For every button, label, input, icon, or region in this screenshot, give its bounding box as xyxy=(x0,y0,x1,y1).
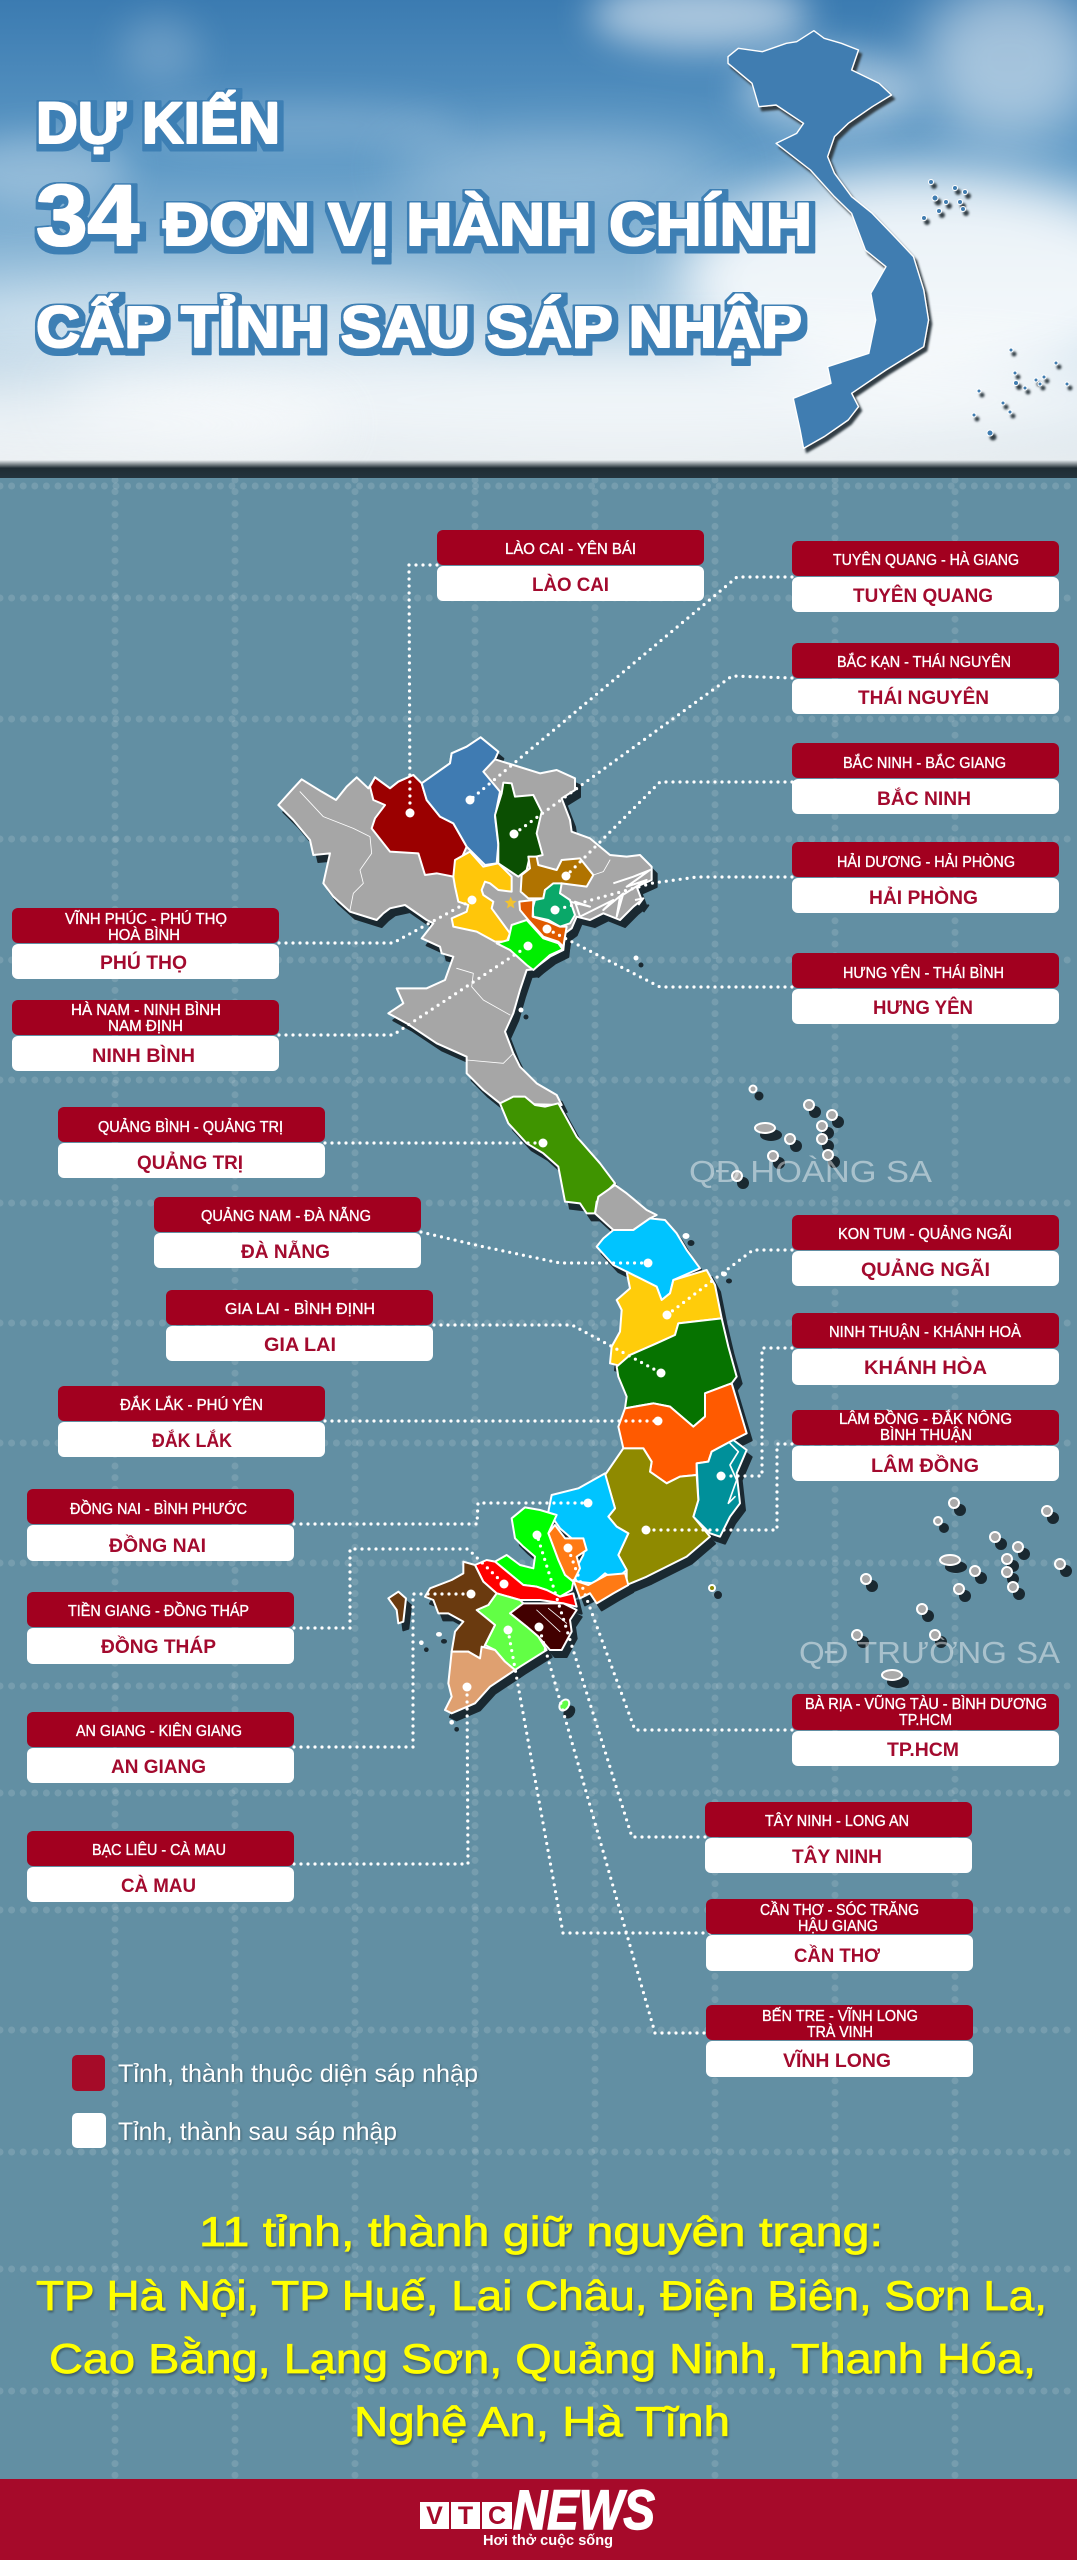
label: Ninh Bình: NAM ĐỊNH xyxy=(108,1018,183,1035)
label: Hưng Yên: HƯNG YÊN xyxy=(873,997,973,1019)
province: Tây Ninh (bright green) xyxy=(495,1507,573,1597)
note: 11 provinces unchanged xyxy=(36,2208,1047,2445)
label: QĐ Hoàng Sa: QĐ HOÀNG SA xyxy=(689,1154,932,1189)
province: Phú Thọ (yellow) xyxy=(452,852,512,942)
Trường Sa islands shadow xyxy=(715,1505,1071,1687)
province borders in the north xyxy=(300,792,610,1063)
province: TP Huế (gray) xyxy=(595,1185,657,1230)
label: Quảng Trị xyxy=(58,1107,325,1178)
province: Thái Nguyên (dark green) xyxy=(495,783,543,877)
logo: VTC News: V xyxy=(426,2502,443,2530)
province: Gia Lai (dark green) xyxy=(617,1318,737,1427)
label: Ninh Bình: HÀ NAM - NINH BÌNH xyxy=(71,1002,221,1019)
label: Thái Nguyên: BẮC KẠN - THÁI NGUYÊN xyxy=(837,653,1011,671)
label: Lâm Đồng: LÂM ĐỒNG xyxy=(871,1455,979,1477)
label: Hưng Yên: HƯNG YÊN - THÁI BÌNH xyxy=(843,965,1004,982)
label: Đà Nẵng xyxy=(154,1197,421,1268)
label: Hải Phòng: HẢI DƯƠNG - HẢI PHÒNG xyxy=(837,854,1015,871)
logo: VTC News: C xyxy=(488,2502,506,2530)
label: Khánh Hòa: NINH THUẬN - KHÁNH HOÀ xyxy=(829,1324,1022,1341)
region: northern unchanged provinces xyxy=(278,737,652,1105)
island: Côn Đảo xyxy=(557,1698,571,1712)
label: Cần Thơ: HẬU GIANG xyxy=(798,1918,878,1935)
Vĩnh Long rivers xyxy=(537,1608,567,1632)
province: Quảng Trị (green) xyxy=(500,1097,615,1213)
province: Hưng Yên (orange) xyxy=(519,900,567,947)
small southern islets xyxy=(419,1632,454,1725)
Ha Long bay islets xyxy=(570,870,650,917)
province: Lâm Đồng (olive) xyxy=(605,1448,710,1585)
label: Ninh Bình: NINH BÌNH xyxy=(92,1045,195,1067)
label: Lào Cai xyxy=(437,530,704,601)
legend swatch: provinces to be merged xyxy=(72,2055,105,2091)
island: Phú Quốc xyxy=(388,1592,406,1623)
leader: Bắc Ninh xyxy=(562,782,792,880)
label: Phú Thọ: HOÀ BÌNH xyxy=(108,927,180,944)
province: Đồng Nai (sky blue) xyxy=(548,1473,628,1583)
Hoàng Sa islands shadow xyxy=(738,1092,843,1188)
Hoàng Sa archipelago xyxy=(732,1086,837,1181)
label: Thái Nguyên xyxy=(792,643,1059,714)
label: An Giang: AN GIANG xyxy=(111,1757,206,1778)
leader: Đà Nẵng xyxy=(421,1232,652,1268)
label: Lâm Đồng: LÂM ĐỒNG - ĐẮK NÔNG xyxy=(839,1410,1012,1428)
label: Cà Mau: BẠC LIÊU - CÀ MAU xyxy=(92,1842,226,1859)
label: Đắk Lắk: ĐẮK LẮK - PHÚ YÊN xyxy=(120,1396,263,1414)
label: Tây Ninh xyxy=(705,1802,972,1873)
logo: VTC News xyxy=(420,2478,655,2549)
label: Đồng Nai xyxy=(27,1489,294,1561)
label: Đồng Nai: ĐỒNG NAI xyxy=(109,1535,206,1557)
leader: Hưng Yên xyxy=(542,924,792,987)
province: Cà Mau (tan) xyxy=(445,1647,515,1713)
dotted background grid xyxy=(0,480,1077,2479)
label: Hải Phòng: HẢI PHÒNG xyxy=(869,887,978,909)
note: 11 provinces unchanged: Cao Bằng, Lạng Sơn, Quảng Ninh, Thanh Hóa, xyxy=(49,2335,1036,2382)
label: Tuyên Quang xyxy=(792,541,1059,612)
province: An Giang (brown) xyxy=(425,1562,497,1658)
map shadow xyxy=(283,744,752,1732)
label: Ninh Bình xyxy=(12,1000,279,1071)
label: Cà Mau xyxy=(27,1831,294,1902)
label: Hưng Yên xyxy=(792,953,1059,1024)
label: TP.HCM xyxy=(792,1694,1059,1766)
province: Vĩnh Long (dark maroon) xyxy=(510,1603,577,1650)
label: Gia Lai: GIA LAI xyxy=(264,1335,336,1356)
logo: VTC News: Hơi thở cuộc sống xyxy=(483,2532,613,2549)
leader: Quảng Ngãi xyxy=(662,1250,792,1320)
label: Đà Nẵng: ĐÀ NẴNG xyxy=(241,1241,330,1263)
province: Khánh Hòa (teal) xyxy=(693,1440,747,1537)
label: Phú Thọ xyxy=(12,908,279,979)
header dark strip xyxy=(0,460,1077,478)
label: Vĩnh Long: TRÀ VINH xyxy=(807,2024,873,2041)
label: Khánh Hòa: KHÁNH HÒA xyxy=(864,1357,987,1379)
label: Đồng Nai: ĐỒNG NAI - BÌNH PHƯỚC xyxy=(70,1500,247,1518)
label: Cần Thơ xyxy=(706,1899,973,1971)
label: Phú Thọ: VĨNH PHÚC - PHÚ THỌ xyxy=(65,911,227,928)
label: Đồng Tháp xyxy=(27,1592,294,1664)
label: Đắk Lắk xyxy=(58,1386,325,1457)
leader: Lào Cai xyxy=(406,565,437,818)
leader: Tây Ninh xyxy=(532,1530,705,1837)
note: 11 provinces unchanged: TP Hà Nội, TP Huế, Lai Châu, Điện Biên, Sơn La, xyxy=(36,2272,1047,2319)
title: ĐƠN VỊ HÀNH CHÍNH xyxy=(163,191,812,258)
leader: TP.HCM xyxy=(564,1544,792,1730)
label: Quảng Ngãi: QUẢNG NGÃI xyxy=(861,1259,990,1281)
leader: Quảng Trị xyxy=(325,1138,548,1148)
footer bar xyxy=(0,2479,1077,2560)
icon: Hà Nội star xyxy=(505,897,517,908)
province: Cần Thơ (light green) xyxy=(477,1593,547,1670)
label: Lào Cai: LÀO CAI - YÊN BÁI xyxy=(505,541,636,558)
label: Thái Nguyên: THÁI NGUYÊN xyxy=(858,687,989,709)
label: TP.HCM: BÀ RỊA - VŨNG TÀU - BÌNH DƯƠNG xyxy=(805,1696,1047,1713)
label: Đắk Lắk: ĐẮK LẮK xyxy=(152,1430,232,1452)
province: TP.HCM north (orange) xyxy=(548,1525,587,1582)
label: Đồng Tháp: ĐỒNG THÁP xyxy=(101,1636,216,1658)
label: Tuyên Quang: TUYÊN QUANG - HÀ GIANG xyxy=(833,552,1019,569)
label: Bắc Ninh: BẮC NINH - BẮC GIANG xyxy=(843,754,1006,772)
Trường Sa archipelago xyxy=(709,1498,1065,1680)
province: Hải Phòng (teal green) xyxy=(533,883,575,927)
leader: Lâm Đồng xyxy=(642,1444,792,1534)
label: Vĩnh Long xyxy=(706,2005,973,2077)
label: Lâm Đồng: BÌNH THUẬN xyxy=(880,1427,972,1444)
province: Đồng Tháp (red) xyxy=(475,1560,577,1607)
legend text: provinces after merging: Tỉnh, thành sau sáp nhập xyxy=(118,2118,397,2146)
label: Lâm Đồng xyxy=(792,1410,1059,1481)
label: Đồng Tháp: TIỀN GIANG - ĐỒNG THÁP xyxy=(68,1602,249,1620)
leader: Ninh Bình xyxy=(279,942,532,1035)
label: TP.HCM: TP.HCM xyxy=(899,1712,952,1729)
leader: Thái Nguyên xyxy=(510,676,792,838)
label: Đà Nẵng: QUẢNG NAM - ĐÀ NẴNG xyxy=(201,1208,371,1225)
title: CẤP TỈNH SAU SÁP NHẬP xyxy=(36,295,802,360)
leader: Hải Phòng xyxy=(550,877,792,914)
label: Hải Phòng xyxy=(792,842,1059,913)
legend swatch: provinces after merging xyxy=(72,2113,106,2148)
leader: Đồng Nai xyxy=(294,1498,592,1524)
Khánh Hòa coast islets xyxy=(728,1443,738,1503)
label: Vĩnh Long: VĨNH LONG xyxy=(783,2050,891,2072)
label: Lào Cai: LÀO CAI xyxy=(532,574,609,596)
note: 11 provinces unchanged: 11 tỉnh, thành giữ nguyên trạng: xyxy=(199,2208,883,2255)
map of Vietnam with provinces xyxy=(278,737,747,1725)
label: An Giang xyxy=(27,1712,294,1783)
province: Ninh Bình (bright green) xyxy=(497,920,563,970)
province: Đắk Lắk (orange) xyxy=(618,1383,747,1483)
label: Quảng Ngãi: KON TUM - QUẢNG NGÃI xyxy=(838,1226,1012,1243)
logo: VTC News: NEWS xyxy=(513,2478,655,2541)
label: Tây Ninh: TÂY NINH - LONG AN xyxy=(765,1813,909,1830)
label: Khánh Hòa xyxy=(792,1313,1059,1385)
label: Bắc Ninh: BẮC NINH xyxy=(877,788,971,810)
title xyxy=(36,91,812,360)
province: Tuyên Quang (blue) xyxy=(422,737,500,865)
province: Lào Cai (maroon) xyxy=(370,775,467,877)
province: Đà Nẵng (light blue) xyxy=(597,1218,700,1300)
leader: Đắk Lắk xyxy=(325,1416,662,1426)
leader: Khánh Hòa xyxy=(716,1348,792,1480)
label: QĐ Trường Sa: QĐ TRƯỜNG SA xyxy=(799,1635,1060,1670)
label: Phú Thọ: PHÚ THỌ xyxy=(100,952,187,974)
label: Gia Lai xyxy=(166,1290,433,1361)
province: TP.HCM south (orange) xyxy=(573,1573,628,1603)
province: Bắc Ninh (brown) xyxy=(521,857,593,898)
leader: Cần Thơ xyxy=(504,1626,710,1933)
leader: Tuyên Quang xyxy=(466,577,792,804)
label: TP.HCM: TP.HCM xyxy=(887,1740,959,1761)
small coastal islets xyxy=(518,956,727,1276)
leader: Vĩnh Long xyxy=(534,1622,711,2033)
title: DỰ KIẾN xyxy=(36,91,280,156)
header sky panel xyxy=(0,0,1077,470)
leader: Cà Mau xyxy=(294,1682,472,1864)
logo: VTC News: T xyxy=(458,2502,473,2530)
label: Gia Lai: GIA LAI - BÌNH ĐỊNH xyxy=(225,1301,375,1318)
label: Tuyên Quang: TUYÊN QUANG xyxy=(853,585,993,607)
label: Quảng Trị: QUẢNG BÌNH - QUẢNG TRỊ xyxy=(98,1119,283,1136)
icon: Vietnam silhouette in header xyxy=(728,31,1069,448)
label: Vĩnh Long: BẾN TRE - VĨNH LONG xyxy=(762,2008,918,2025)
note: 11 provinces unchanged: Nghệ An, Hà Tĩnh xyxy=(354,2398,730,2445)
legend text: provinces to be merged: Tỉnh, thành thuộc diện sáp nhập xyxy=(118,2060,478,2088)
label: Cần Thơ: CẦN THƠ xyxy=(794,1945,881,1967)
label: Quảng Trị: QUẢNG TRỊ xyxy=(137,1152,243,1174)
legend xyxy=(72,2055,478,2148)
label: Quảng Ngãi xyxy=(792,1215,1059,1286)
leader: An Giang xyxy=(294,1590,476,1747)
leader: Đồng Tháp xyxy=(294,1549,508,1628)
label: Tây Ninh: TÂY NINH xyxy=(792,1846,882,1868)
label: Bắc Ninh xyxy=(792,743,1059,814)
label: Cần Thơ: CẦN THƠ - SÓC TRĂNG xyxy=(760,1902,919,1919)
title: 34 xyxy=(36,168,139,264)
label: Cà Mau: CÀ MAU xyxy=(121,1875,196,1897)
label: An Giang: AN GIANG - KIÊN GIANG xyxy=(76,1723,242,1740)
leader: Phú Thọ xyxy=(279,896,476,943)
province: Quảng Ngãi (yellow) xyxy=(610,1270,722,1367)
leader: Gia Lai xyxy=(434,1325,666,1378)
